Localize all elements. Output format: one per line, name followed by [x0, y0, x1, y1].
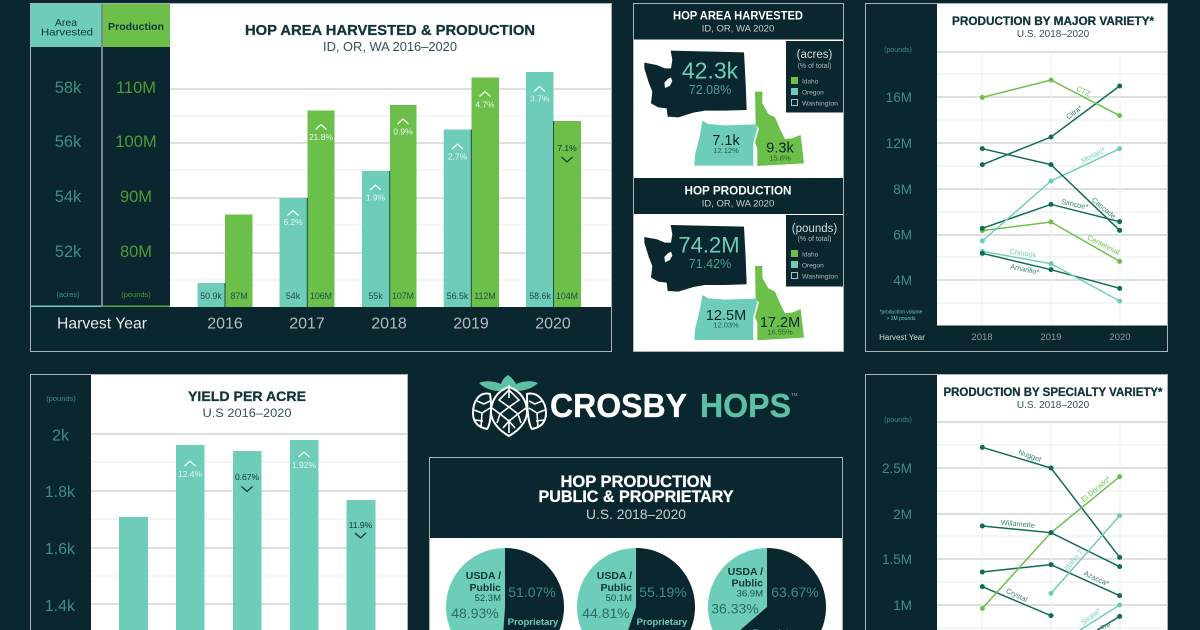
bar chart: yield: 0.67% [235, 472, 259, 482]
axis: production: 100M [115, 133, 157, 151]
chart title: YIELD PER ACRE [188, 389, 306, 404]
y axis: 2.5M [882, 461, 912, 476]
bar chart: yield: 12.4% [178, 469, 202, 479]
legend: pounds: (pounds) [792, 223, 837, 235]
bar chart: area and production: 6.2% [283, 217, 303, 227]
map: area harvested by state: 12.12% [713, 146, 739, 155]
x axis: harvest year [879, 332, 1131, 343]
pie: 2018: Proprietary [508, 617, 559, 628]
pie: 2020: 63.67% [771, 584, 819, 600]
axis: production: 80M [120, 243, 152, 261]
y axis: 2k [52, 428, 70, 444]
line chart: specialty varieties: Strata* [1079, 606, 1103, 627]
legend: pounds [786, 215, 843, 286]
heading: hop production: HOP PRODUCTION [684, 184, 792, 198]
line chart: major varieties: Cascade [1090, 195, 1118, 221]
bar chart: area and production: 50.9k [200, 291, 222, 301]
pie: 2019: Proprietary [637, 617, 688, 628]
y axis [45, 394, 76, 615]
x axis: harvest year: 2016 [207, 316, 243, 332]
pie: 2019: USDA / [597, 570, 632, 582]
bar chart: area and production: 104M [556, 291, 578, 301]
y axis: 8M [893, 182, 912, 197]
map: area harvested by state: 15.8% [769, 154, 791, 162]
map: area harvested by state: 42.3k [682, 58, 739, 84]
chart title [245, 22, 535, 54]
bar chart: area and production: 1.9% [366, 192, 386, 202]
panel: production by specialty variety [865, 374, 1168, 630]
chart title [944, 387, 1163, 411]
heading: hop production: ID, OR, WA 2020 [702, 198, 774, 210]
wordmark: CROSBY [550, 388, 687, 425]
axis: production: 90M [120, 188, 152, 206]
map: area harvested by state [644, 51, 804, 166]
x axis: harvest year: Harvest Year [879, 333, 925, 342]
bar chart: area and production: 7.1% [557, 143, 577, 153]
pie: 2018: 48.93% [451, 605, 499, 621]
x axis: harvest year: 2017 [289, 316, 325, 332]
panel: hop area harvested and production [30, 4, 612, 352]
y axis: 6M [893, 228, 912, 242]
panel: public and proprietary production [429, 457, 843, 630]
y axis [882, 417, 912, 613]
line chart: major varieties: Mosaic* [1080, 145, 1107, 165]
axis: area harvested [31, 4, 101, 307]
chart title: U.S 2016–2020 [202, 406, 292, 420]
pie: 2019: Public [600, 582, 632, 594]
panel: yield per acre [30, 374, 408, 630]
pie: 2019: 55.19% [639, 584, 687, 600]
heading: hop area harvested [634, 4, 843, 40]
bar chart: yield: 11.9% [349, 520, 373, 530]
bar chart: area and production: 106M [310, 291, 332, 301]
line chart: specialty varieties: Nugget [1017, 447, 1042, 464]
chart title: U.S. 2018–2020 [1017, 29, 1090, 40]
y axis: (pounds) [46, 394, 76, 403]
axis: area harvested: Harvested [41, 26, 93, 38]
pie: 2020 [708, 548, 826, 630]
bar chart: area and production: 55k [368, 291, 383, 301]
pie: 2018: Public [469, 582, 501, 594]
line chart: major varieties: Simcoe* [1061, 197, 1089, 211]
legend: acres: Oregon [802, 90, 824, 96]
map: production by state [644, 225, 804, 340]
heading: hop production [634, 178, 843, 214]
bar chart: yield: 1.92% [292, 460, 316, 470]
map: production by state: 16.55% [767, 328, 793, 336]
bar chart: area and production: 21.8% [309, 132, 333, 142]
x axis: harvest year: 2020 [535, 316, 571, 332]
chart title: U.S. 2018–2020 [1017, 400, 1090, 411]
legend: acres [786, 41, 843, 112]
line chart: specialty varieties: El Dorado* [1079, 474, 1112, 504]
axis: production: (pounds) [121, 290, 151, 299]
heading [430, 458, 842, 538]
y axis: 12M [886, 136, 912, 151]
heading: HOP PRODUCTION [560, 473, 712, 491]
map: area harvested by state: 72.08% [689, 83, 731, 97]
y axis: 4M [893, 273, 912, 288]
heading: U.S. 2018–2020 [586, 506, 686, 522]
map: area harvested by state: 9.3k [766, 140, 794, 156]
y axis: 1.8k [45, 484, 76, 501]
x axis: harvest year: 2020 [1109, 332, 1131, 343]
map: area harvested by state: 7.1k [712, 133, 740, 149]
pie: 2018: 52.3M [475, 593, 501, 604]
bar chart: area and production: 58.6k [529, 291, 551, 301]
legend: pounds: Idaho [802, 252, 819, 258]
axis: area harvested: 56k [55, 133, 82, 151]
x axis: harvest year [57, 316, 571, 332]
line chart: specialty varieties: Crystal [1004, 586, 1029, 604]
y axis: 16M [886, 90, 912, 105]
line chart: major varieties: CTZ [1075, 84, 1092, 98]
panel: production by major variety [866, 4, 1168, 352]
bar chart: area and production: 112M [474, 291, 496, 301]
legend: pounds: (% of total) [798, 236, 831, 243]
chart title [188, 389, 306, 420]
axis: production: 110M [116, 79, 156, 97]
wordmark: HOPS [700, 388, 791, 425]
line chart: major varieties: Chinook [1009, 247, 1037, 260]
x axis: harvest year: 2018 [971, 332, 993, 343]
panel: state maps [634, 4, 844, 352]
legend: pounds: Washington [802, 274, 838, 280]
pie: 2018: 51.07% [508, 584, 556, 600]
map: production by state: 71.42% [689, 257, 731, 271]
heading: hop area harvested: ID, OR, WA 2020 [702, 24, 774, 34]
logo: crosby hops [473, 375, 798, 436]
bar chart: yield [119, 440, 376, 630]
axis: area harvested: (acres) [56, 290, 80, 299]
bar chart: area and production: 87M [230, 291, 248, 301]
wordmark [550, 388, 798, 425]
y axis: 1.6k [45, 541, 76, 558]
y axis: > 3M pounds [886, 316, 916, 322]
chart title: PRODUCTION BY SPECIALTY VARIETY* [944, 387, 1163, 399]
pie: 2020: USDA / [728, 566, 763, 578]
legend: acres: (acres) [797, 49, 833, 61]
axis: area harvested: 54k [55, 188, 82, 206]
bar chart: area and production: 54k [286, 291, 301, 301]
bar chart: area and production: 56.5k [447, 291, 469, 301]
chart title: PRODUCTION BY MAJOR VARIETY* [952, 16, 1155, 28]
bar chart: area and production [198, 72, 581, 307]
pie: 2019: 44.81% [582, 605, 630, 621]
line chart: major varieties: Citra* [1064, 103, 1084, 121]
y axis: 2M [893, 507, 912, 522]
line chart: specialty varieties: Idaho 7 [1062, 548, 1085, 572]
pie: 2020: 36.9M [737, 588, 763, 600]
map: production by state: 12.03% [713, 320, 739, 330]
legend: pounds: Oregon [802, 262, 824, 270]
line chart: specialty varieties: Willamette [1000, 518, 1035, 530]
axis: area harvested: 58k [55, 79, 82, 97]
y axis: 1.5M [882, 552, 912, 567]
legend: acres: Idaho [802, 78, 819, 86]
map: production by state: 17.2M [760, 315, 800, 331]
pie: 2018 [446, 548, 564, 630]
map: production by state: 12.5M [706, 308, 746, 324]
line chart: major varieties: Amarillo* [1010, 262, 1040, 277]
line chart: specialty varieties [980, 445, 1122, 630]
bar chart: area and production: 3.7% [530, 94, 550, 104]
bar chart: area and production: 2.7% [448, 152, 468, 162]
line chart: major varieties: Centennial [1086, 233, 1121, 257]
line chart: major varieties [980, 77, 1122, 303]
wordmark: TM [791, 392, 798, 397]
y axis: 1.4k [45, 598, 76, 615]
heading: hop area harvested: HOP AREA HARVESTED [673, 8, 803, 22]
legend: acres: Washington [802, 100, 838, 108]
pie: 2019: 50.1M [606, 593, 632, 604]
y axis: 1M [893, 598, 912, 613]
y axis [880, 47, 923, 322]
y axis: (pounds) [884, 417, 912, 424]
bar chart: area and production: 0.9% [393, 126, 413, 136]
x axis: harvest year: 2018 [371, 316, 407, 332]
chart title: ID, OR, WA 2016–2020 [323, 40, 457, 54]
chart title [952, 16, 1155, 40]
icon: hop cones [473, 375, 546, 436]
map: production by state: 74.2M [678, 232, 740, 258]
y axis: (pounds) [884, 47, 912, 54]
axis: production [103, 4, 170, 307]
pie: 2020: Public [731, 578, 763, 590]
axis: production: Production [108, 22, 164, 33]
line chart: specialty varieties: Azacca* [1082, 569, 1111, 588]
pie: 2019 [577, 548, 695, 630]
chart title: HOP AREA HARVESTED & PRODUCTION [245, 22, 535, 39]
axis divider [101, 4, 103, 307]
x axis: harvest year: 2019 [1040, 332, 1062, 343]
x axis: harvest year: 2019 [453, 316, 489, 332]
axis: area harvested: Area [55, 17, 77, 29]
heading: PUBLIC & PROPRIETARY [538, 488, 734, 506]
legend: acres: (% of total) [798, 63, 831, 70]
bar chart: area and production: 4.7% [475, 100, 495, 110]
axis: area harvested: 52k [55, 243, 82, 261]
y axis: *production volume [880, 310, 923, 316]
x axis: harvest year: Harvest Year [57, 316, 148, 332]
bar chart: area and production: 107M [392, 291, 414, 301]
pie: 2020: 36.33% [711, 600, 759, 616]
pie: 2018: USDA / [466, 570, 501, 582]
